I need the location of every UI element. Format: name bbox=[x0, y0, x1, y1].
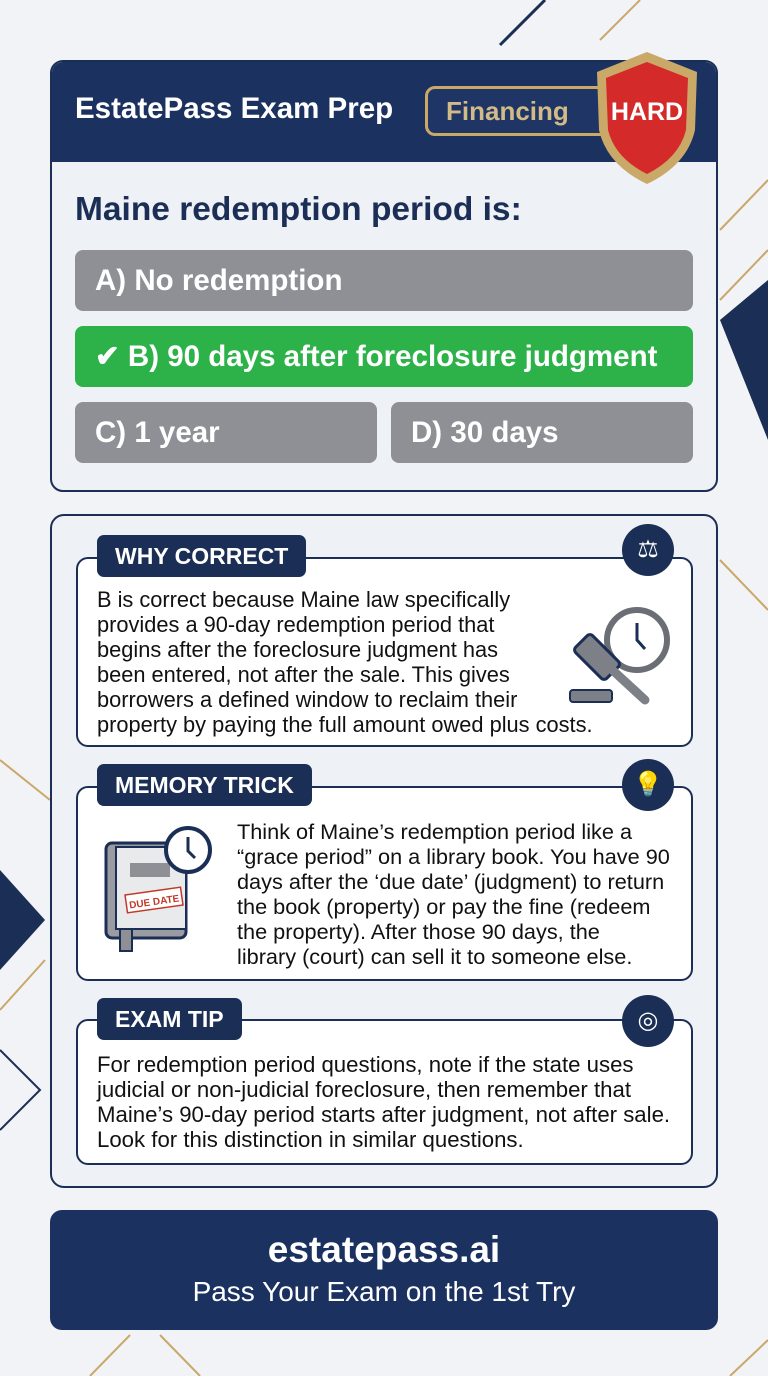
text: why correct: been entered, not after the sale. This gives bbox=[97, 662, 510, 687]
icon: book due date bbox=[104, 826, 212, 952]
footer tagline: Pass Your Exam on the 1st Try bbox=[193, 1276, 575, 1307]
text: exam tip: For redemption period questions, note if the state uses bbox=[97, 1052, 634, 1077]
icon: lightbulb circle: 💡 bbox=[633, 771, 663, 798]
tag: memory trick bbox=[97, 764, 312, 806]
icon: target circle bbox=[622, 995, 674, 1047]
option D bbox=[391, 402, 693, 463]
text: memory trick: the property). After those 90 days, the bbox=[237, 919, 600, 944]
text: exam tip: judicial or non-judicial foreclosure, then remember that bbox=[97, 1077, 631, 1102]
option A: A) No redemption bbox=[95, 264, 342, 297]
text: memory trick bbox=[237, 819, 670, 969]
text: why correct: begins after the foreclosure judgment has bbox=[97, 637, 498, 662]
text: memory trick: Think of Maine’s redemption period like a bbox=[237, 819, 632, 844]
icon: gavel circle: ⚖ bbox=[637, 536, 659, 563]
question: Maine redemption period is: bbox=[75, 191, 522, 228]
box: why correct bbox=[76, 557, 693, 747]
footer url: estatepass.ai bbox=[268, 1229, 500, 1270]
text: exam tip bbox=[96, 1052, 670, 1152]
text: exam tip: Maine’s 90-day period starts after judgment, not after sale. bbox=[97, 1102, 670, 1127]
text: why correct: property by paying the full amount owed plus costs. bbox=[97, 712, 593, 737]
icon: gavel and clock bbox=[569, 607, 670, 704]
category pill: Financing: Financing bbox=[446, 96, 569, 126]
tag: why correct: WHY CORRECT bbox=[115, 543, 288, 569]
category pill: Financing bbox=[425, 86, 610, 136]
text: memory trick: days after the ‘due date’ (judgment) to return bbox=[237, 869, 664, 894]
text: why correct bbox=[97, 587, 593, 737]
text: why correct: borrowers a defined window to reclaim their bbox=[97, 687, 517, 712]
panel: explanation card bbox=[50, 514, 718, 1188]
icon: target circle: ◎ bbox=[638, 1007, 658, 1034]
title: EstatePass Exam Prep bbox=[75, 92, 393, 125]
text: why correct: B is correct because Maine law specifically bbox=[97, 587, 510, 612]
icon: lightbulb circle bbox=[622, 759, 674, 811]
badge: HARD shield bbox=[597, 52, 697, 184]
text: memory trick: the book (property) or pay the fine (redeem bbox=[237, 894, 650, 919]
option B correct bbox=[75, 326, 693, 387]
tag: exam tip: EXAM TIP bbox=[115, 1006, 224, 1032]
text: memory trick: library (court) can sell it to someone else. bbox=[237, 944, 632, 969]
text: why correct: provides a 90-day redemption period that bbox=[97, 612, 494, 637]
box: exam tip bbox=[76, 1019, 693, 1165]
tag: memory trick: MEMORY TRICK bbox=[115, 772, 294, 798]
icon: gavel circle bbox=[622, 524, 674, 576]
footer bbox=[50, 1210, 718, 1330]
option B correct: ✔ B) 90 days after foreclosure judgment bbox=[95, 340, 657, 373]
tag: exam tip bbox=[97, 998, 242, 1040]
option C bbox=[75, 402, 377, 463]
icon: book due date: DUE DATE bbox=[129, 893, 180, 911]
header bar bbox=[52, 62, 720, 162]
tag: why correct bbox=[97, 535, 306, 577]
panel: question card bbox=[50, 60, 718, 492]
badge: HARD shield: HARD bbox=[611, 98, 683, 126]
text: memory trick: “grace period” on a library book. You have 90 bbox=[237, 844, 670, 869]
option C: C) 1 year bbox=[95, 416, 220, 449]
text: exam tip: Look for this distinction in similar questions. bbox=[97, 1127, 524, 1152]
box: memory trick bbox=[76, 786, 693, 981]
option D: D) 30 days bbox=[411, 416, 559, 449]
option A bbox=[75, 250, 693, 311]
